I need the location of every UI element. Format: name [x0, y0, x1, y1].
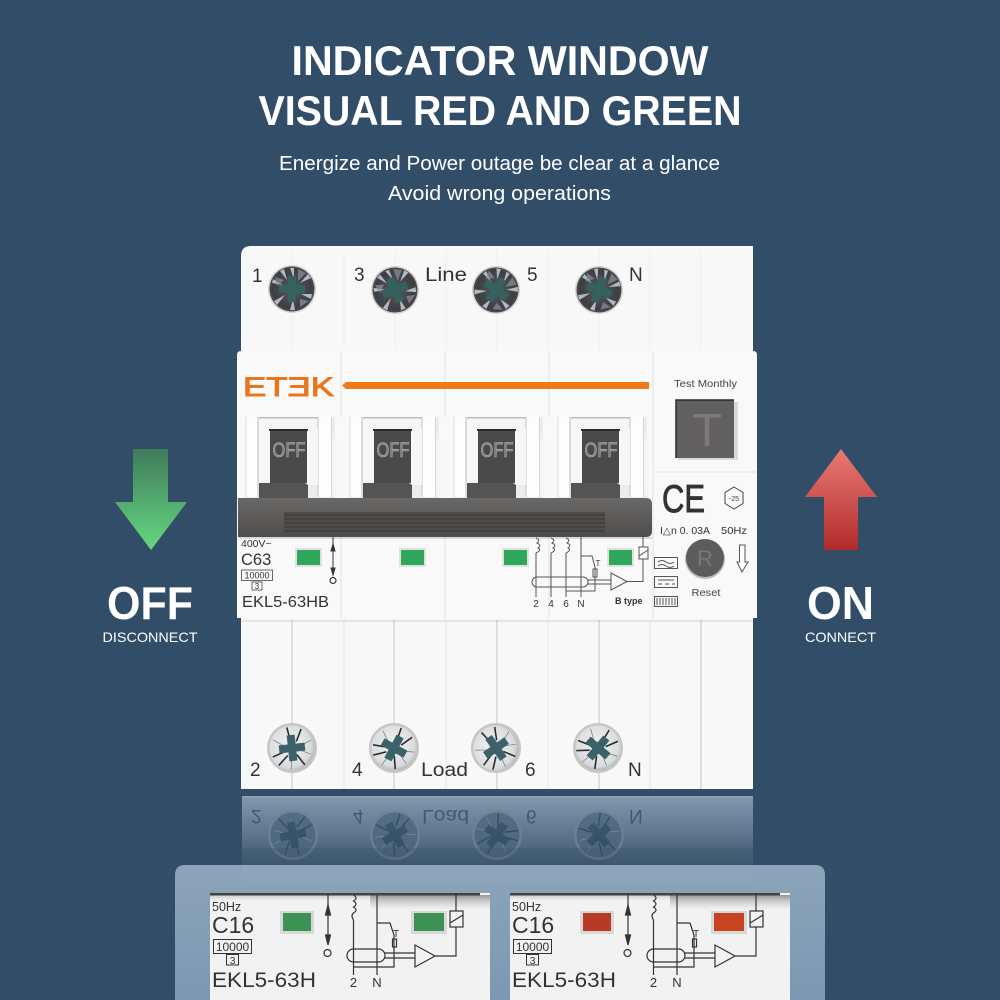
- rocker switches: OFF: [272, 439, 306, 462]
- inset: red indicator: 50Hz: [512, 900, 541, 914]
- arrow: on: [805, 449, 877, 550]
- down arrow outline: [737, 545, 748, 572]
- rating text: EKL5-63HB: [242, 594, 329, 611]
- subtitle: Energize and Power outage be clear at a glance: [279, 153, 720, 175]
- reflection: N: [629, 805, 643, 826]
- inset: red indicator: EKL5-63H: [512, 969, 616, 992]
- inset: red indicator: 10000: [516, 940, 550, 954]
- temperature icon: [725, 487, 743, 509]
- reflection: Load: [422, 805, 469, 826]
- arrow: off: [115, 449, 187, 550]
- rating line: [660, 526, 747, 537]
- top terminal labels: 1: [252, 266, 263, 287]
- green indicator windows: [295, 548, 634, 567]
- panel: comparison: [175, 865, 825, 1000]
- rating line: I△n 0. 03A: [660, 526, 710, 537]
- bottom terminal labels: 4: [352, 760, 363, 781]
- breaker: main body: [237, 351, 757, 618]
- reflection: 6: [526, 805, 537, 826]
- circuit labels: 2: [533, 599, 539, 610]
- title: [258, 37, 742, 134]
- circuit diagram: [532, 537, 648, 597]
- rocker switches: OFF: [376, 439, 410, 462]
- rating line: 50Hz: [721, 526, 747, 537]
- top screws: [268, 257, 630, 323]
- top terminal labels: 3: [354, 265, 365, 286]
- on label: CONNECT: [805, 629, 876, 645]
- breaker: bottom terminal block: [241, 618, 753, 789]
- logo: ETƎK: [243, 372, 334, 402]
- circuit labels: N: [577, 599, 585, 610]
- rocker switches: OFF: [584, 439, 618, 462]
- B type label: B type: [615, 596, 643, 606]
- rocker switches: OFF: [480, 439, 514, 462]
- rating text: 3: [255, 582, 260, 591]
- handle bar: [238, 498, 652, 539]
- reflection: 2: [251, 805, 262, 826]
- bottom terminal labels: [250, 760, 642, 781]
- inset: green indicator: 2: [350, 975, 357, 990]
- circuit labels: 4: [548, 599, 554, 610]
- reset button: [685, 539, 725, 599]
- inset: red indicator: 2: [650, 975, 657, 990]
- inset: green indicator: 50Hz: [212, 900, 241, 914]
- breaker: top terminal block: [241, 246, 753, 352]
- inset: green indicator: EKL5-63H: [212, 969, 316, 992]
- inset: red indicator: [510, 893, 790, 1000]
- on label: ON: [807, 577, 874, 629]
- bottom screws: [265, 713, 633, 783]
- reset button: Reset: [692, 587, 721, 599]
- off label: DISCONNECT: [102, 629, 198, 645]
- temperature icon: -25: [729, 496, 739, 503]
- inset: green indicator: [210, 893, 490, 1000]
- rating text: [241, 538, 329, 611]
- inset: red indicator: N: [672, 975, 682, 990]
- reflection: [242, 796, 753, 870]
- inset: green indicator: N: [372, 975, 382, 990]
- inset: green indicator: T: [393, 929, 399, 940]
- bottom terminal labels: 6: [525, 760, 536, 781]
- orange stripe: [342, 382, 649, 389]
- reflection: 4: [353, 805, 364, 826]
- circuit labels: 6: [563, 599, 569, 610]
- subtitle: [279, 153, 720, 205]
- inset: green indicator: 3: [230, 955, 236, 967]
- rocker switches: [245, 417, 649, 499]
- inset: green indicator: 10000: [216, 940, 250, 954]
- circuit labels: T: [596, 559, 601, 568]
- rating text: 400V~: [241, 538, 272, 550]
- test button: [674, 379, 738, 460]
- top terminal labels: N: [629, 265, 643, 286]
- bottom terminal labels: 2: [250, 760, 261, 781]
- inset: green indicator: C16: [212, 912, 254, 938]
- rating text: 10000: [244, 570, 270, 580]
- subtitle: Avoid wrong operations: [388, 183, 611, 205]
- top terminal labels: 5: [527, 265, 538, 286]
- inset: red indicator: C16: [512, 912, 554, 938]
- bottom terminal labels: Load: [421, 760, 468, 781]
- bottom terminal labels: N: [628, 760, 642, 781]
- circuit labels: [533, 559, 601, 610]
- title: INDICATOR WINDOW: [292, 37, 709, 84]
- waveform icons: [654, 558, 678, 606]
- off label: OFF: [107, 577, 193, 629]
- title: VISUAL RED AND GREEN: [258, 87, 742, 134]
- test button: T: [692, 404, 722, 456]
- reset button: R: [697, 546, 713, 571]
- test button: Test Monthly: [674, 379, 737, 390]
- rating text: C63: [241, 551, 271, 569]
- top terminal labels: [252, 265, 643, 287]
- CE mark: CE: [662, 478, 705, 521]
- inset: red indicator: T: [693, 929, 699, 940]
- inset: red indicator: 3: [530, 955, 536, 967]
- top terminal labels: Line: [425, 265, 467, 286]
- travel arrow: [330, 537, 336, 584]
